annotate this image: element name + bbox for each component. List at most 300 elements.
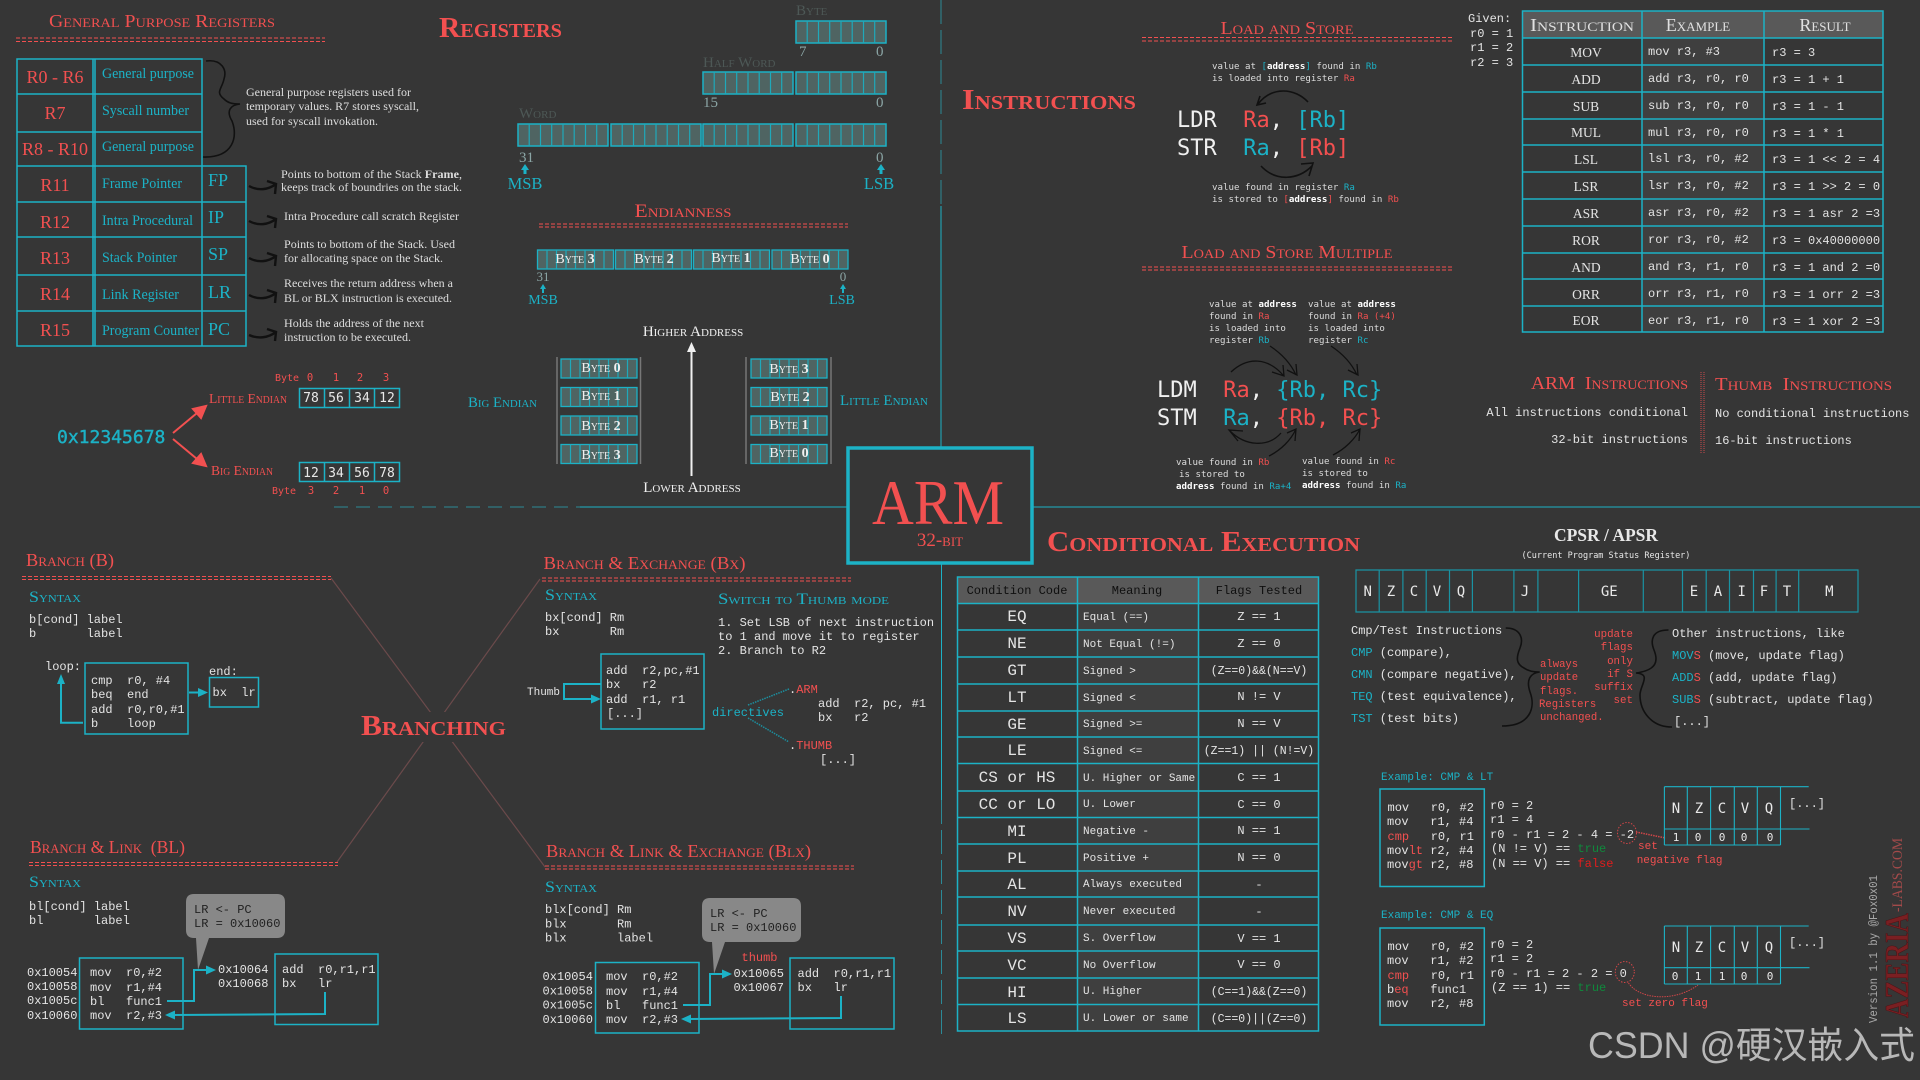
cmp/test instructions: CMN (compare negative), [1351, 668, 1517, 682]
panel: thumb instructions: Thumb Instructions [1715, 374, 1892, 394]
flags: 1 [1719, 970, 1725, 983]
word bytes row [528, 250, 855, 308]
text: general purpose description: used for syscall invokation. [246, 114, 378, 128]
little endian stack: Little Endian [840, 393, 928, 409]
flags [1664, 787, 1825, 845]
evaluation: r0 - r1 = 2 - 4 = -2 [1490, 828, 1634, 842]
annotations: load multiple: found in Ra (+4) [1308, 312, 1396, 322]
word bytes row: MSB [528, 293, 558, 308]
text: register notes: Points to bottom of the Stack Frame, [281, 167, 462, 181]
function code: thumb [742, 951, 778, 965]
heading: load and store multiple: Load and Store Multiple [1182, 242, 1393, 262]
table: condition codes: CS or HS [979, 769, 1055, 787]
syntax: blx label [545, 932, 653, 946]
table: instruction examples: asr r3, r0, #2 [1648, 206, 1749, 220]
annotations: load multiple: value at address [1308, 300, 1396, 310]
table: instruction examples: r3 = 1 xor 2 =3 [1772, 315, 1880, 329]
note: always update flags: unchanged. [1540, 712, 1604, 724]
flags: 0 [1695, 831, 1701, 844]
other instructions: SUBS (subtract, update flag) [1672, 693, 1874, 707]
flags: 1 [1695, 970, 1701, 983]
table: condition codes: U. Higher or Same [1083, 773, 1195, 785]
code box: cmp r0, r1 [1388, 969, 1474, 983]
caller code [27, 958, 183, 1029]
thumb code: bx r2 [606, 678, 656, 692]
annotations: store multiple: address found in Ra [1302, 481, 1406, 491]
status register bits: A [1714, 584, 1723, 600]
note: update flags only if S suffix set: only [1607, 656, 1634, 668]
caller code: 0x10054 [542, 970, 593, 984]
text: given values [1468, 12, 1513, 70]
syntax: b label [29, 627, 123, 641]
table: instruction examples: r3 = 1 << 2 = 4 [1772, 153, 1880, 167]
panel: ARM instructions [1486, 373, 1688, 447]
little endian stack: Byte 0 [769, 446, 809, 461]
code: LDM STM [1157, 378, 1382, 431]
flags: C [1718, 940, 1726, 956]
panel: thumb instructions: 16-bit instructions [1715, 434, 1852, 448]
note: update flags only if S suffix set: set [1614, 695, 1633, 707]
big endian stack: Byte 0 [581, 361, 621, 376]
flags: N [1672, 801, 1680, 817]
table: instruction examples: r3 = 1 - 1 [1772, 100, 1844, 114]
table: instruction examples: r3 = 1 >> 2 = 0 [1772, 180, 1880, 194]
note: update flags only if S suffix set: update [1594, 629, 1633, 641]
table: instruction examples: r3 = 1 asr 2 =3 [1772, 207, 1880, 221]
panel: example CMP and EQ [1380, 910, 1825, 1025]
evaluation [1490, 799, 1723, 871]
title: ARM 32-bit: ARM [872, 467, 1004, 538]
directives: [...] [820, 753, 856, 767]
note: update flags only if S suffix set: if S [1607, 669, 1633, 681]
value: 0x12345678 [57, 427, 165, 448]
big endian bytes: 0 [383, 485, 389, 497]
cmp/test instructions: TST (test bits) [1351, 712, 1459, 726]
little endian bytes: 2 [357, 372, 363, 384]
little endian bytes: 34 [354, 391, 370, 406]
text: register notes: BL or BLX instruction is executed. [284, 291, 452, 305]
heading: branch link exchange: Branch & Link & Exchange (Blx) [546, 841, 811, 862]
evaluation: (N == V) == false [1491, 857, 1613, 871]
little endian bytes: 78 [303, 391, 319, 406]
status register bits: T [1783, 584, 1792, 600]
status register bits: Q [1457, 584, 1465, 600]
end code [209, 665, 258, 707]
code: LDR STR [1177, 108, 1349, 161]
register table: R8 - R10 [22, 139, 88, 159]
annotation: store: value found in register Ra [1212, 183, 1355, 193]
table: condition codes: N == V [1237, 717, 1281, 731]
table: condition codes: Signed >= [1083, 719, 1142, 731]
code: LDR STR: LDR Ra, [Rb] [1177, 108, 1349, 133]
flags: [...] [1789, 936, 1825, 950]
syntax [29, 589, 123, 641]
table: condition codes: U. Higher [1083, 986, 1142, 998]
caller code: mov r0,#2 [606, 970, 678, 984]
flags: 0 [1741, 831, 1747, 844]
loop code: beq end [91, 688, 149, 702]
code box: mov r0, #2 [1388, 940, 1474, 954]
cmp/test instructions: TEQ (test equivalence), [1351, 690, 1517, 704]
red arrows [173, 406, 206, 466]
table: instruction examples: r3 = 0x40000000 [1772, 234, 1880, 248]
evaluation: set zero flag [1622, 998, 1708, 1010]
register table: Syscall number [102, 103, 189, 119]
annotations: store multiple [1176, 457, 1406, 492]
table: condition codes: Signed <= [1083, 746, 1142, 758]
text: general purpose description: temporary values. R7 stores syscall, [246, 99, 419, 113]
evaluation [1490, 938, 1708, 1010]
switch to thumb mode: 1. Set LSB of next instruction [718, 616, 934, 630]
word bytes row: Byte 2 [634, 252, 674, 267]
table: condition codes: No Overflow [1083, 960, 1156, 972]
annotations: load multiple: found in Ra [1209, 312, 1269, 322]
function code: add r0,r1,r1 [798, 967, 891, 981]
annotations: load multiple [1209, 300, 1396, 346]
status register bits: N [1363, 584, 1372, 600]
heading: branch and exchange: Branch & Exchange (Bx) [544, 553, 746, 574]
panel: branch [22, 550, 331, 734]
syntax: blx[cond] Rm [545, 903, 631, 917]
table: condition codes: Z == 1 [1237, 610, 1281, 624]
table: condition codes: Meaning [1112, 584, 1162, 598]
table: condition codes: Condition Code [967, 584, 1067, 598]
caller code: bl func1 [606, 999, 678, 1013]
heading: endianness: Endianness [634, 201, 732, 222]
flags: 0 [1741, 970, 1747, 983]
table: condition codes: MI [1007, 823, 1027, 841]
flags: N [1672, 940, 1680, 956]
table: condition codes: GT [1007, 662, 1027, 680]
address arrow: Higher Address [643, 324, 743, 340]
status register bits: F [1760, 584, 1768, 600]
annotations: load multiple: register Rc [1308, 336, 1368, 346]
code: LDM STM: LDM Ra, {Rb, Rc} [1157, 378, 1382, 403]
heading: CPSR / APSR: (Current Program Status Register) [1522, 551, 1690, 561]
flags: 0 [1719, 831, 1725, 844]
register table: R12 [40, 212, 70, 232]
brace: cmp/test [1502, 628, 1540, 726]
table: condition codes: Signed < [1083, 693, 1136, 705]
table: condition codes: LS [1007, 1010, 1027, 1028]
table: condition codes: C == 1 [1237, 771, 1281, 785]
panel: CPSR / APSR [1351, 525, 1874, 729]
loop code: cmp r0, #4 [91, 674, 170, 688]
table: condition codes: AL [1007, 876, 1027, 894]
annotation: load [1212, 62, 1377, 84]
panel: general purpose registers [16, 11, 462, 346]
table: condition codes: CC or LO [979, 796, 1055, 814]
word diagram [508, 106, 894, 193]
table: instruction examples: AND [1571, 260, 1601, 275]
loop code [45, 660, 208, 734]
status register bits: J [1521, 584, 1529, 600]
table: condition codes: (Z==1) || (N!=V) [1204, 745, 1314, 758]
note: always update flags: always [1540, 659, 1578, 671]
big endian bytes: 78 [379, 466, 395, 481]
switch to thumb mode: 2. Branch to R2 [718, 644, 826, 658]
big endian stack: Big Endian [468, 395, 537, 411]
table: condition codes: NE [1007, 635, 1027, 653]
text: register notes: Receives the return address when a [284, 276, 454, 290]
table: instruction examples: r3 = 1 * 1 [1772, 127, 1844, 141]
flags: Z [1695, 940, 1703, 956]
annotations: load multiple: value at address [1209, 300, 1297, 310]
caller code: 0x1005c [542, 998, 593, 1012]
panel: 0x12345678 byte order [57, 372, 400, 497]
register table: Frame Pointer [102, 176, 182, 192]
annotation: store [1212, 183, 1399, 205]
half word diagram: Half Word [703, 55, 776, 71]
cmp/test instructions: CMP (compare), [1351, 646, 1452, 660]
word bytes row: Byte 0 [790, 252, 830, 267]
panel: branch and link [27, 837, 378, 1029]
code: LDM STM: STM Ra, {Rb, Rc} [1157, 406, 1382, 431]
end code: end: [209, 665, 238, 679]
heading: conditional execution: Conditional Execution [1047, 527, 1361, 558]
big endian stack: Byte 2 [581, 419, 621, 434]
word bytes row: Byte 1 [711, 251, 751, 266]
table: instruction examples: mul r3, r0, r0 [1648, 126, 1749, 140]
register table: LR [208, 282, 231, 302]
arrow: load [1257, 91, 1308, 105]
status register bits: E [1690, 584, 1698, 600]
thumb code: [...] [607, 707, 643, 721]
switch to thumb mode: to 1 and move it to register [718, 630, 920, 644]
big endian bytes: 3 [308, 485, 314, 497]
title: ARM 32-bit: 32-bit [917, 530, 963, 551]
table: condition codes: (C==0)||(Z==0) [1211, 1013, 1307, 1026]
code box: mov r1, #4 [1387, 815, 1473, 829]
register table: FP [208, 170, 228, 190]
arrows: register notes [249, 181, 276, 341]
table: condition codes [958, 577, 1318, 1031]
register table: R15 [40, 320, 70, 340]
flags: 1 [1673, 831, 1679, 844]
address arrow: Lower Address [643, 480, 741, 496]
table: instruction examples: r3 = 3 [1772, 46, 1815, 60]
heading: registers: Registers [439, 12, 562, 44]
table: condition codes: LE [1007, 742, 1027, 760]
panel: thumb instructions [1715, 374, 1909, 448]
panel: example CMP and LT [1380, 772, 1825, 886]
function code: 0x10064 [218, 963, 268, 977]
register table: R13 [40, 248, 70, 268]
panel: load and store [1142, 18, 1452, 205]
word diagram: 0 [876, 150, 884, 166]
evaluation: negative flag [1637, 855, 1723, 867]
table: instruction examples: r3 = 1 + 1 [1772, 73, 1844, 87]
big endian bytes [211, 462, 400, 497]
big endian stack: Byte 1 [581, 389, 621, 404]
flags: 0 [1672, 970, 1678, 983]
syntax: bx Rm [545, 625, 624, 639]
code: LDR STR: STR Ra, [Rb] [1177, 136, 1349, 161]
table: condition codes: Equal (==) [1083, 612, 1149, 624]
code box: beq func1 [1387, 983, 1466, 997]
text: general purpose description [246, 85, 419, 128]
function code: 0x10068 [218, 977, 268, 991]
arrows: call and return [165, 966, 325, 1020]
syntax: Syntax [545, 879, 597, 896]
byte diagram [796, 3, 886, 60]
little endian bytes: Little Endian [209, 392, 287, 407]
register table: Program Counter [102, 323, 199, 339]
table: instruction examples: MOV [1570, 45, 1602, 60]
table: condition codes: LT [1007, 689, 1027, 707]
function code: 0x10067 [734, 981, 784, 995]
half word diagram [703, 55, 886, 111]
code box [1380, 789, 1484, 886]
table: instruction examples: orr r3, r1, r0 [1648, 287, 1749, 301]
thumb code [527, 654, 704, 729]
syntax: Syntax [545, 587, 597, 604]
thumb code: add r2,pc,#1 [606, 664, 700, 678]
annotation: load: value at [address] found in Rb [1212, 62, 1377, 72]
word diagram: LSB [864, 174, 894, 193]
address arrow [643, 324, 743, 496]
note: update flags only if S suffix set [1594, 629, 1634, 707]
directives: bx r2 [818, 711, 868, 725]
table: instruction examples: sub r3, r0, r0 [1648, 99, 1749, 113]
big endian bytes: Byte [272, 486, 296, 497]
table: instruction examples: EOR [1572, 313, 1600, 328]
directives: directives [712, 706, 784, 720]
note: always update flags: flags. [1540, 686, 1578, 698]
table: condition codes: - [1255, 878, 1263, 892]
evaluation: r0 - r1 = 2 - 2 = 0 [1490, 967, 1627, 981]
evaluation: (Z == 1) == true [1491, 981, 1606, 995]
word diagram: MSB [508, 174, 542, 193]
heading: general purpose registers: General Purpose Registers [49, 11, 275, 31]
table: condition codes: Positive + [1083, 853, 1149, 865]
big endian stack: Byte 3 [581, 448, 621, 463]
big endian bytes: 34 [328, 466, 344, 481]
table: instruction examples: lsl r3, r0, #2 [1648, 152, 1749, 166]
table: condition codes: (C==1)&&(Z==0) [1211, 986, 1307, 999]
table: condition codes: NV [1007, 903, 1027, 921]
arrows: store multiple [1229, 429, 1360, 456]
little endian bytes: 3 [383, 372, 389, 384]
callout: LR <- PC [710, 907, 768, 921]
switch to thumb mode: Switch to Thumb mode [718, 591, 889, 608]
table: condition codes: - [1255, 905, 1263, 919]
big endian bytes: Big Endian [211, 464, 273, 479]
big endian bytes: 12 [303, 466, 319, 481]
annotations: load multiple: register Rb [1209, 336, 1269, 346]
text: register notes: for allocating space on the Stack. [284, 251, 443, 265]
table: instruction examples: ASR [1573, 206, 1599, 221]
table: condition codes: N == 1 [1237, 824, 1281, 838]
table: instruction examples: Instruction [1530, 15, 1635, 35]
table: condition codes: Flags Tested [1216, 584, 1302, 598]
heading: CPSR / APSR [1522, 525, 1690, 561]
other instructions: [...] [1674, 715, 1710, 729]
code box: movgt r2, #8 [1387, 858, 1473, 872]
table: condition codes: HI [1007, 984, 1027, 1002]
status register bits: C [1410, 584, 1418, 600]
directives [712, 683, 926, 767]
panel: example CMP and EQ: Example: CMP & EQ [1381, 910, 1494, 922]
caller code: mov r0,#2 [90, 966, 162, 980]
brace: other instructions [1636, 630, 1672, 727]
table: condition codes: GE [1007, 716, 1027, 734]
register table: Intra Procedural [102, 213, 193, 229]
syntax [545, 879, 653, 946]
table: condition codes: C == 0 [1237, 798, 1281, 812]
byte diagram: 7 [799, 44, 807, 60]
caller code: 0x1005c [27, 994, 77, 1008]
code box: mov r0, #2 [1388, 801, 1474, 815]
little endian bytes: Byte [275, 373, 299, 384]
table: condition codes: N == 0 [1237, 851, 1281, 865]
syntax: bx[cond] Rm [545, 611, 624, 625]
function code: bx lr [282, 977, 332, 991]
table: instruction examples: and r3, r1, r0 [1648, 260, 1749, 274]
table: instruction examples: ORR [1572, 287, 1600, 302]
table: instruction examples: add r3, r0, r0 [1648, 72, 1749, 86]
big endian bytes: 2 [333, 485, 339, 497]
panel: data sizes [508, 3, 894, 193]
table: condition codes: Always executed [1083, 879, 1182, 891]
caller code: bl func1 [90, 995, 162, 1009]
register table: Link Register [102, 287, 179, 303]
loop code: add r0,r0,#1 [91, 703, 185, 717]
word bytes row: LSB [829, 293, 855, 308]
table: condition codes: N != V [1237, 690, 1281, 704]
table: condition codes: S. Overflow [1083, 933, 1156, 945]
caller code: mov r2,#3 [606, 1013, 678, 1027]
annotations: store multiple: is stored to [1179, 470, 1245, 480]
half word diagram: 15 [703, 95, 718, 111]
cmp/test instructions: Cmp/Test Instructions [1351, 624, 1502, 638]
little endian bytes [209, 372, 400, 408]
evaluation: r0 = 2 [1490, 938, 1533, 952]
flags [1664, 926, 1825, 984]
little endian stack: Byte 2 [770, 390, 810, 405]
caller code: mov r1,#4 [606, 985, 678, 999]
caller code: mov r1,#4 [90, 981, 162, 995]
syntax: Syntax [29, 589, 81, 606]
text: register notes: Intra Procedure call scratch Register [284, 209, 459, 223]
table: condition codes: Z == 0 [1237, 637, 1281, 651]
note: update flags only if S suffix set: suffix [1594, 682, 1633, 694]
status register bits: GE [1601, 584, 1618, 600]
annotation: load: is loaded into register Ra [1212, 74, 1355, 84]
arrows: call and return [681, 970, 841, 1024]
table: condition codes: V == 1 [1237, 932, 1281, 946]
byte diagram: 0 [876, 44, 884, 60]
callout [702, 898, 801, 974]
evaluation: r1 = 2 [1490, 952, 1533, 966]
half word diagram: 0 [876, 95, 884, 111]
caller code: 0x10058 [542, 984, 593, 998]
note: always update flags [1539, 659, 1604, 724]
arrows: load multiple [1231, 346, 1358, 376]
caller code: mov r2,#3 [90, 1009, 162, 1023]
directives: .ARM [789, 683, 818, 697]
code box: mov r2, #8 [1387, 997, 1473, 1011]
annotations: store multiple: address found in Ra+4 [1176, 482, 1292, 492]
text: general purpose description: General purpose registers used for [246, 85, 411, 99]
end code: bx lr [212, 686, 256, 700]
panel: ARM instructions: All instructions conditional [1486, 406, 1688, 420]
flags: [...] [1789, 797, 1825, 811]
panel: branch and exchange [527, 553, 934, 767]
register table: R14 [40, 284, 70, 304]
word bytes row: 0 [840, 269, 846, 284]
syntax: bl label [29, 914, 130, 928]
